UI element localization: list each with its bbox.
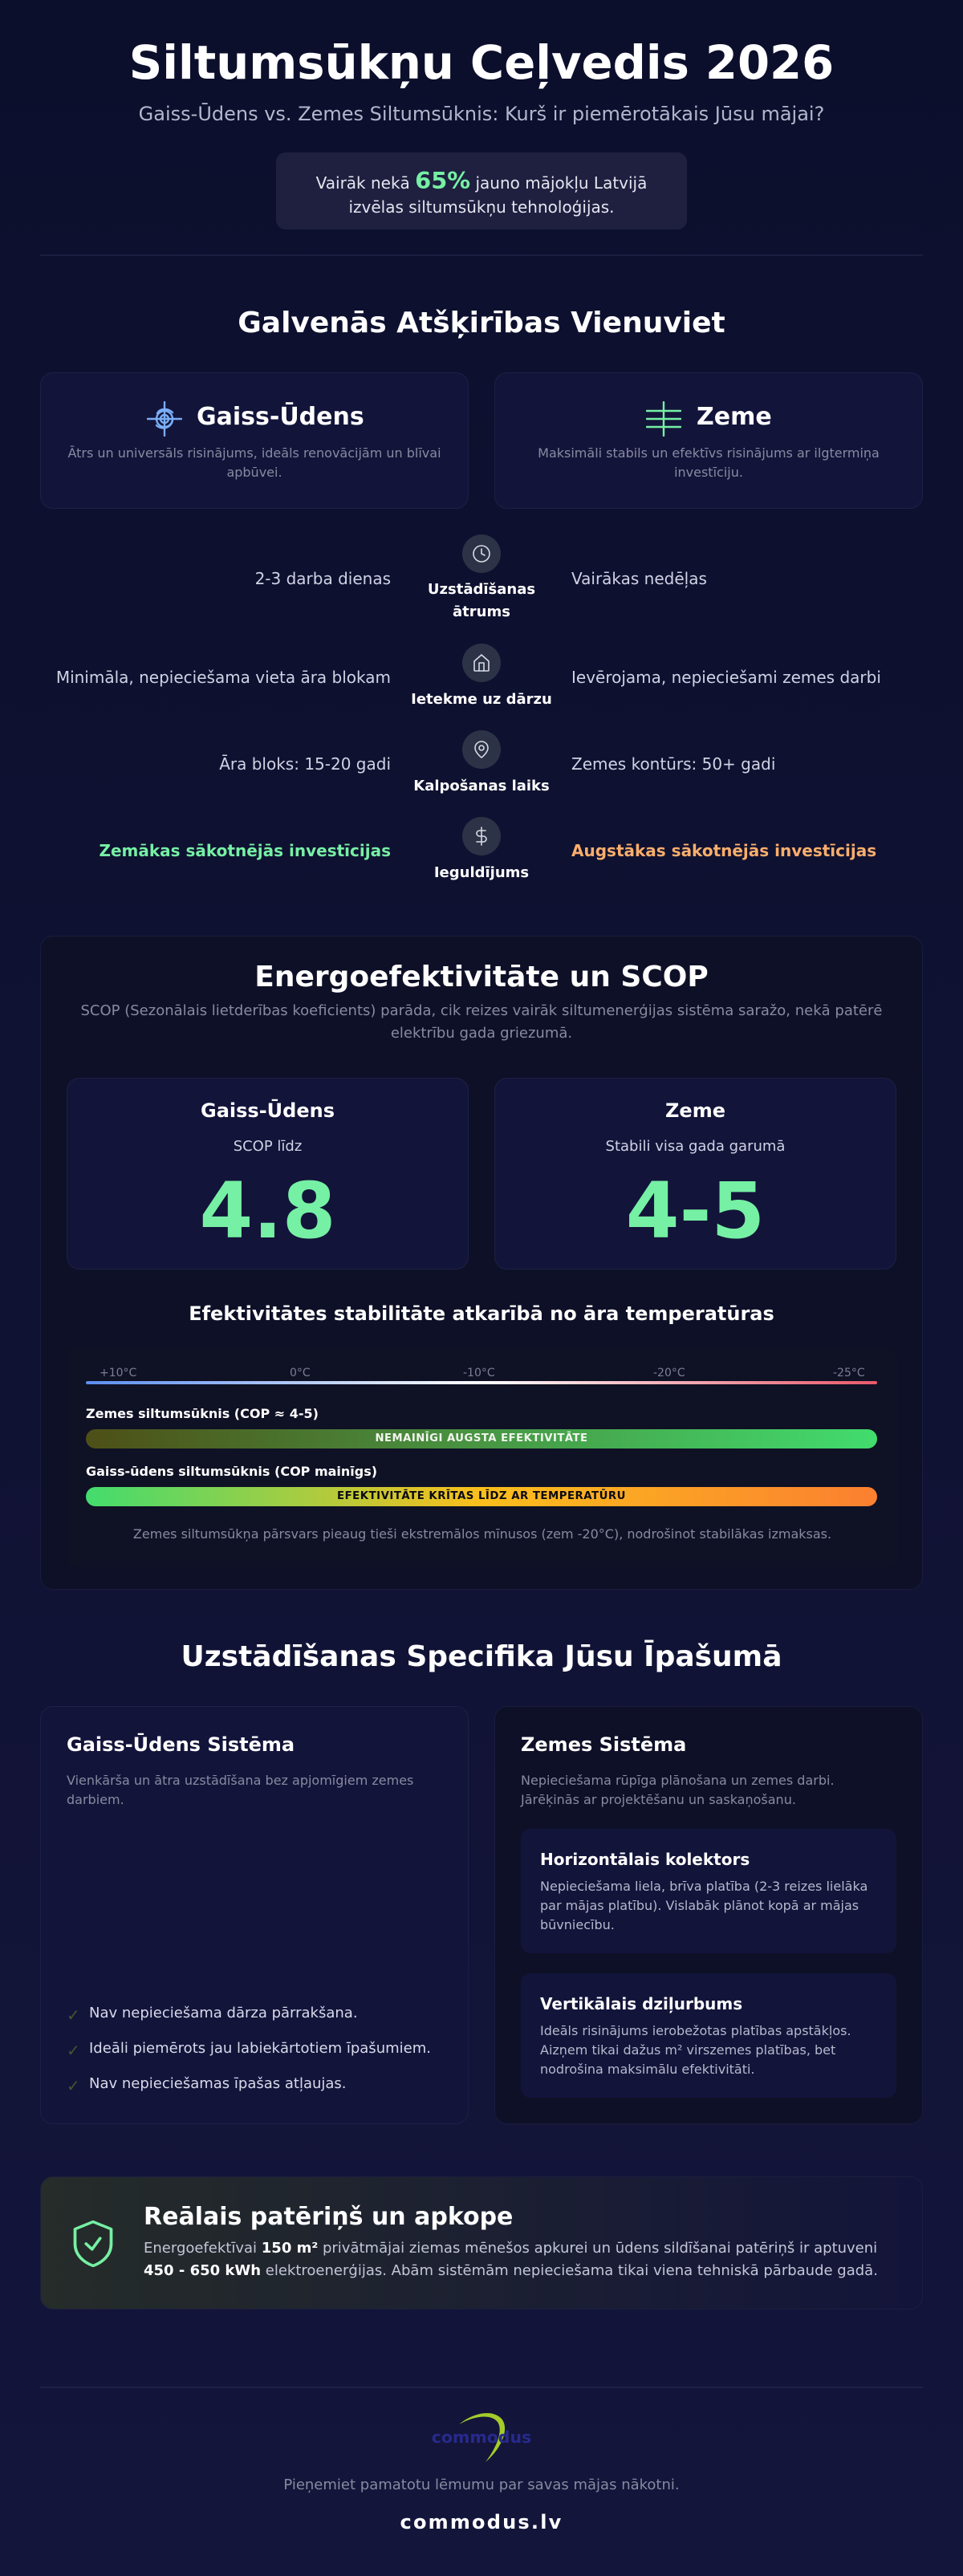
temperature scale: -25°C	[833, 1367, 865, 1379]
right value: Augstākas sākotnējās investīcijas	[571, 841, 876, 860]
right value: Zemes kontūrs: 50+ gadi	[571, 754, 775, 774]
row label: Uzstādīšanas	[428, 581, 535, 598]
sub-card text: par mājas platību). Vislabāk plānot kopā ar mājas	[540, 1898, 859, 1913]
checklist: ✓	[67, 2041, 80, 2060]
temperature scale: +10°C	[100, 1367, 136, 1379]
sub-card text: Aizņem tikai dažus m² virszemes platības, bet	[540, 2042, 835, 2058]
card title: Zeme	[665, 1099, 725, 1122]
icon: location pin	[462, 730, 501, 769]
temperature scale: 0°C	[290, 1367, 311, 1379]
bar label: ground: Zemes siltumsūknis (COP ≈ 4-5)	[86, 1406, 319, 1421]
comparison row: garden impact	[56, 644, 881, 708]
description	[80, 1002, 882, 1042]
callout text: Energoefektīvai 150 m² privātmājai ziemas mēnešos apkurei un ūdens sildīšanai patēriņš ir aptuveni	[144, 2240, 877, 2257]
card title: Gaiss-Ūdens	[197, 403, 364, 431]
checklist: Nav nepieciešama dārza pārrakšana.	[89, 2005, 358, 2021]
right value: Ievērojama, nepieciešami zemes darbi	[571, 668, 881, 687]
panel: ground system	[494, 1706, 923, 2124]
sub-card text: Nepieciešama liela, brīva platība (2-3 reizes lielāka	[540, 1879, 868, 1894]
card: ground SCOP	[494, 1078, 896, 1270]
title: Siltumsūkņu Ceļvedis 2026	[129, 36, 834, 90]
panel description: darbiem.	[67, 1792, 124, 1807]
description: elektrību gada griezumā.	[391, 1025, 572, 1042]
panel description: Nepieciešama rūpīga plānošana un zemes darbi.	[521, 1773, 835, 1788]
card title: Gaiss-Ūdens	[201, 1099, 335, 1122]
bar: air-water	[86, 1487, 877, 1506]
card description	[538, 445, 880, 480]
sub-card text: Ideāls risinājums ierobežotas platības apstākļos.	[540, 2023, 851, 2038]
callout text	[144, 2240, 878, 2279]
sub-card text: nodrošina maksimālu efektivitāti.	[540, 2062, 755, 2077]
row label: Kalpošanas laiks	[413, 778, 550, 794]
subtitle: Gaiss-Ūdens vs. Zemes Siltumsūknis: Kurš ir piemērotākais Jūsu mājai?	[139, 103, 824, 125]
row label: ātrums	[453, 603, 510, 620]
icon: air fan	[147, 401, 182, 437]
card description	[67, 445, 441, 480]
logo: commodus	[432, 2413, 531, 2462]
icon: shield	[74, 2220, 112, 2268]
bar: ground: NEMAINĪGI AUGSTA EFEKTIVITĀTE	[375, 1432, 588, 1444]
stat text: Vairāk nekā 65% jauno mājokļu Latvijā	[316, 167, 647, 194]
checklist: ✓	[67, 2005, 80, 2025]
row label: Ietekme uz dārzu	[411, 691, 552, 708]
sub-card text	[540, 1879, 868, 1932]
card: air-water SCOP	[67, 1078, 469, 1270]
bar: ground	[86, 1429, 877, 1448]
icon: ground collector	[646, 401, 681, 437]
icon: house	[462, 644, 501, 682]
checklist	[67, 2005, 431, 2095]
callout: real consumption	[40, 2176, 923, 2310]
panel: air-water system	[40, 1706, 469, 2124]
SCOP value: 4-5	[626, 1166, 765, 1256]
sub-card title: Horizontālais kolektors	[540, 1850, 750, 1869]
row label	[428, 581, 535, 620]
panel description: Vienkārša un ātra uzstādīšana bez apjomīgiem zemes	[67, 1773, 413, 1788]
panel: energy efficiency	[40, 936, 923, 1590]
description: SCOP (Sezonālais lietderības koeficients) parāda, cik reizes vairāk siltumenerģijas sistēma saražo, nekā patērē	[80, 1002, 882, 1019]
card description: apbūvei.	[226, 465, 282, 480]
card title: Zeme	[697, 403, 772, 431]
checklist: ✓	[67, 2076, 80, 2095]
sub-card text	[540, 2023, 851, 2077]
comparison row: investment	[99, 817, 876, 881]
SCOP value: 4.8	[199, 1166, 336, 1256]
left value: Minimāla, nepieciešama vieta āra blokam	[56, 668, 391, 687]
stat text: izvēlas siltumsūkņu tehnoloģijas.	[348, 197, 615, 217]
sub-card title: Vertikālais dziļurbums	[540, 1994, 742, 2013]
panel: air-water summary	[40, 372, 469, 509]
panel description: Jārēķinās ar projektēšanu un saskaņošanu.	[521, 1792, 796, 1807]
stat text	[316, 167, 647, 217]
row label: Ieguldījums	[434, 864, 529, 881]
sub-card: vertical borehole	[521, 1973, 896, 2098]
sub-card: horizontal collector	[521, 1829, 896, 1953]
heading: installation: Uzstādīšanas Specifika Jūsu Īpašumā	[181, 1640, 782, 1673]
heading: Energoefektivitāte un SCOP	[254, 961, 709, 993]
chart: efficiency by temperature	[67, 1349, 898, 1567]
card note: Stabili visa gada garumā	[606, 1138, 785, 1155]
temperature scale: -10°C	[463, 1367, 495, 1379]
panel description	[67, 1773, 413, 1807]
callout title: Reālais patēriņš un apkope	[144, 2203, 513, 2231]
card description: Maksimāli stabils un efektīvs risinājums ar ilgtermiņa	[538, 445, 880, 461]
panel: ground summary	[494, 372, 923, 509]
chart note: Zemes siltumsūkņa pārsvars pieaug tieši ekstremālos mīnusos (zem -20°C), nodrošinot stabilākas izmaksas.	[133, 1526, 831, 1542]
logo swoosh	[459, 2413, 506, 2462]
left value: 2-3 darba dienas	[255, 569, 391, 588]
comparison row: lifespan	[219, 730, 775, 794]
stat callout	[276, 152, 687, 230]
right value: Vairākas nedēļas	[571, 569, 707, 588]
closing tagline: Pieņemiet pamatotu lēmumu par savas mājas nākotni.	[283, 2476, 680, 2493]
panel title: Gaiss-Ūdens Sistēma	[67, 1733, 295, 1756]
sub-card text: būvniecību.	[540, 1917, 615, 1932]
chart heading: Efektivitātes stabilitāte atkarībā no āra temperatūras	[189, 1302, 774, 1325]
panel title: Zemes Sistēma	[521, 1733, 686, 1756]
left value: Āra bloks: 15-20 gadi	[219, 754, 391, 774]
bar: air-water: EFEKTIVITĀTE KRĪTAS LĪDZ AR TEMPERATŪRU	[337, 1490, 626, 1502]
checklist: Nav nepieciešamas īpašas atļaujas.	[89, 2075, 347, 2092]
card description: Ātrs un universāls risinājums, ideāls renovācijām un blīvai	[67, 445, 441, 461]
temperature scale: -20°C	[653, 1367, 685, 1379]
temperature scale	[86, 1367, 877, 1384]
card note: SCOP līdz	[234, 1138, 302, 1155]
card description: investīciju.	[674, 465, 743, 480]
checklist: Ideāli piemērots jau labiekārtotiem īpašumiem.	[89, 2040, 431, 2057]
logo wordmark: commodus	[432, 2428, 531, 2447]
bar label: air-water: Gaiss-ūdens siltumsūknis (COP mainīgs)	[86, 1464, 377, 1479]
icon: dollar	[462, 817, 501, 855]
icon: clock	[462, 534, 501, 573]
callout text: 450 - 650 kWh elektroenerģijas. Abām sistēmām nepieciešama tikai viena tehniskā pārbaude gadā.	[144, 2262, 878, 2279]
heading: key differences: Galvenās Atšķirības Vienuviet	[238, 307, 725, 339]
website: commodus.lv	[400, 2511, 563, 2533]
left value: Zemākas sākotnējās investīcijas	[99, 841, 391, 860]
comparison row: installation speed	[255, 534, 707, 620]
panel description	[520, 1773, 835, 1807]
